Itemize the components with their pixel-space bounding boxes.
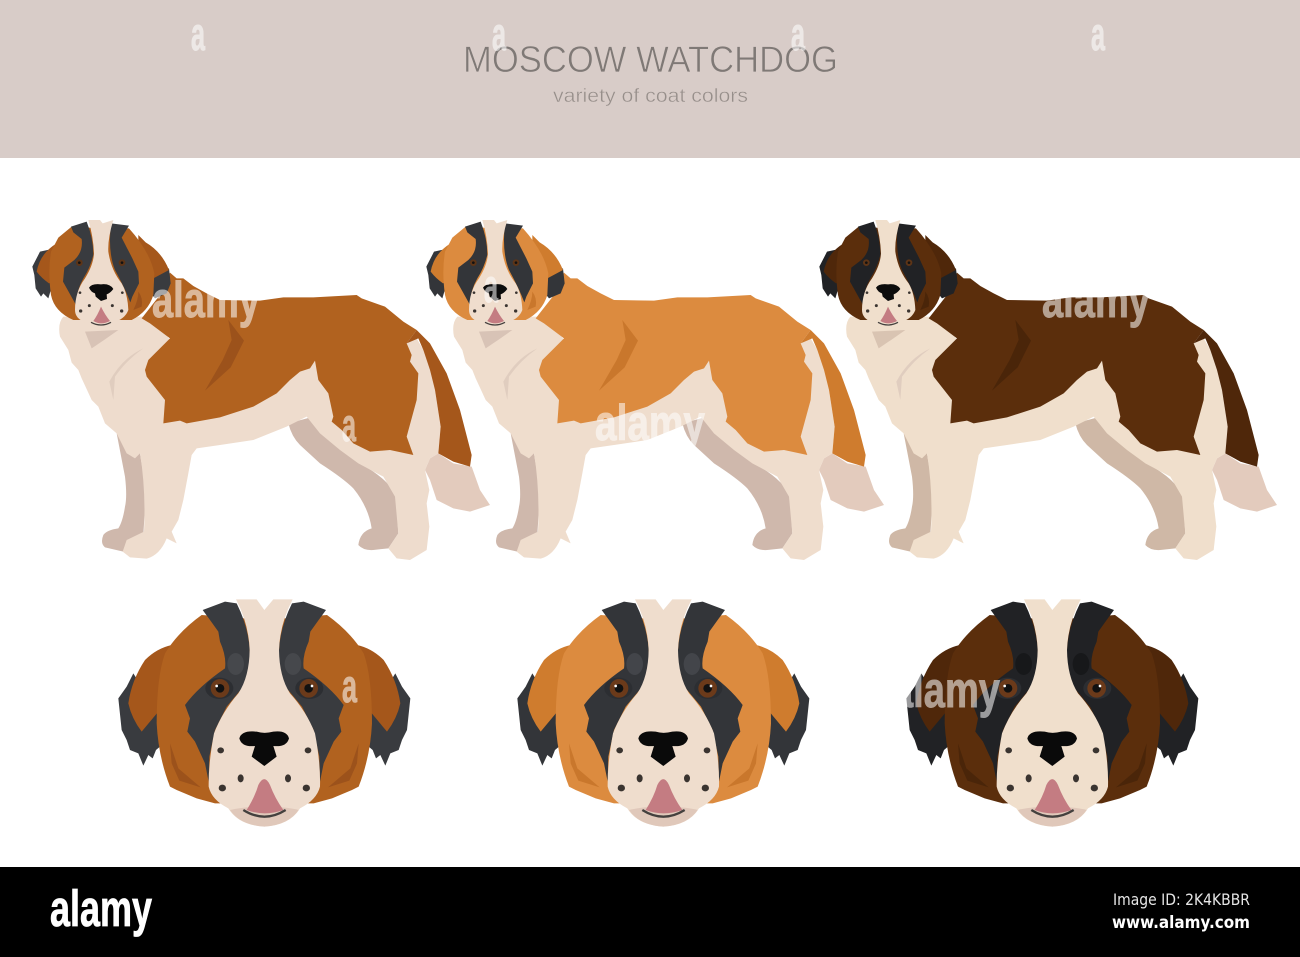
footer logo: alamy (50, 880, 152, 937)
watermarks: alamy (595, 395, 705, 451)
header band (0, 0, 1300, 158)
watermarks: alamy (1042, 272, 1150, 328)
watermarks: a (191, 8, 205, 60)
watermarks: alamy (152, 272, 260, 328)
dog face: orange coat (517, 599, 809, 827)
watermarks (152, 8, 1150, 718)
subtitle: variety of coat colors (553, 86, 748, 107)
watermarks: a (492, 8, 506, 60)
dog profile: red-brown coat (32, 220, 490, 560)
watermarks: alamy (892, 662, 1000, 718)
dog profile: dark brown coat (819, 220, 1277, 560)
watermarks: a (484, 260, 498, 312)
watermarks: a (1091, 8, 1105, 60)
image id: Image ID: 2K4KBBR (1113, 890, 1250, 909)
footer bar (0, 867, 1300, 957)
dog face: red-brown coat (118, 599, 410, 827)
dog profile: orange coat (426, 220, 884, 560)
watermarks: a (342, 660, 357, 712)
dog face: dark brown coat (906, 599, 1198, 827)
website: www.alamy.com (1112, 913, 1250, 933)
title: MOSCOW WATCHDOG (463, 39, 838, 80)
watermarks: a (791, 8, 805, 60)
watermarks: a (342, 399, 356, 451)
